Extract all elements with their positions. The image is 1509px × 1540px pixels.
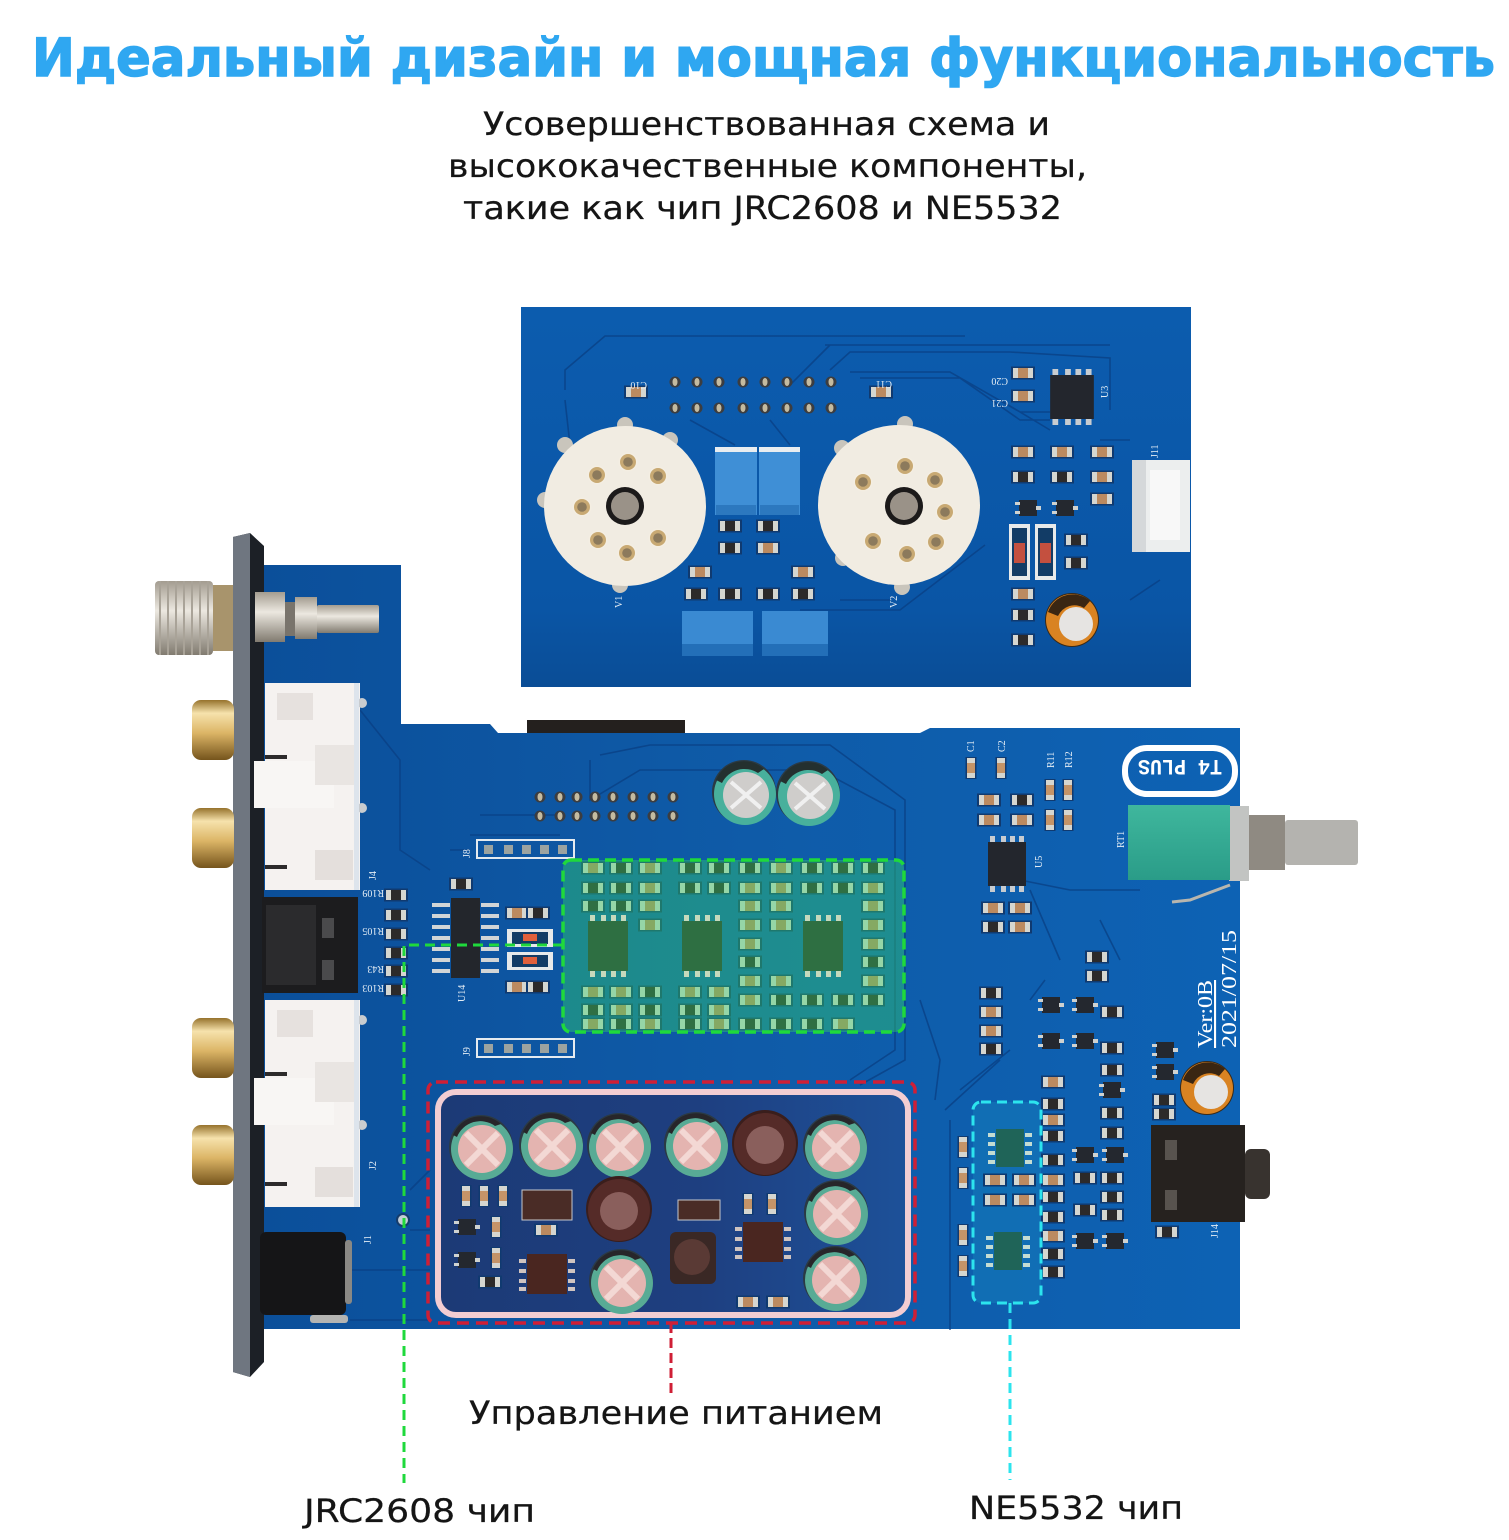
silkscreen labels upper board: C10 [630, 379, 647, 390]
green highlight: JRC2608 zone [563, 860, 904, 1032]
IC U5 [988, 836, 1026, 892]
silkscreen labels upper board: J11 [1150, 444, 1161, 458]
SMD parts [624, 366, 1114, 646]
silkscreen labels main board: R103 [362, 982, 384, 993]
black edge part [527, 720, 685, 733]
silkscreen labels upper board: V1 [614, 596, 625, 608]
IC U3 [1050, 369, 1094, 425]
knurled thumb screw [155, 581, 233, 655]
silkscreen labels main board: R43 [367, 963, 384, 974]
silkscreen labels upper board: V2 [889, 596, 900, 608]
tube socket V2 [818, 416, 980, 595]
power section [438, 1092, 908, 1315]
silkscreen labels upper board: U3 [1100, 386, 1111, 398]
capacitors and inductors [449, 1110, 868, 1314]
leader: power management [670, 1323, 672, 1393]
T4 PLUS badge [1125, 748, 1235, 794]
power ICs [519, 1222, 791, 1294]
electrolytic capacitors EC8 EC3 [712, 760, 840, 826]
power SMD [454, 1185, 790, 1308]
silkscreen labels upper board: C11 [876, 378, 892, 389]
pin header [670, 376, 836, 414]
silkscreen labels main board: R109 [362, 887, 384, 898]
subtitle text block: Усовершенствованная схема и [483, 105, 1050, 143]
silkscreen labels upper board: C21 [991, 397, 1008, 408]
pin header [534, 792, 678, 822]
diodes D1 D2 [522, 1190, 720, 1220]
silkscreen labels main board: J14 [1210, 1224, 1221, 1238]
silkscreen labels main board: J4 [368, 871, 379, 880]
version marking: Ver:0B [1193, 980, 1217, 1048]
panel: metal front plate [233, 533, 264, 1377]
subtitle text block: такие как чип JRC2608 и NE5532 [463, 189, 1062, 227]
title: Идеальный дизайн и мощная функциональность [32, 28, 1495, 89]
amplifier zone parts [581, 862, 885, 1030]
headers J8 J9 [477, 840, 574, 1057]
orange capacitor [1045, 593, 1099, 647]
orange capacitor [1180, 1061, 1234, 1115]
version marking: 2021/07/15 [1217, 930, 1241, 1048]
leader: JRC2608 [404, 945, 563, 1483]
silkscreen labels main board: J1 [363, 1235, 374, 1244]
leader: NE5532 [1008, 1303, 1012, 1480]
potentiometer RT1 [1128, 805, 1358, 902]
inductor L2 [670, 1232, 716, 1284]
silkscreen labels main board: U5 [1034, 856, 1045, 868]
connector J11 [1132, 460, 1190, 552]
label: power management: Управление питанием [469, 1394, 883, 1432]
silkscreen labels upper board [614, 375, 1161, 608]
silkscreen labels upper board: C20 [991, 375, 1008, 386]
right side SMD parts [958, 757, 1179, 1278]
label: NE5532 chip: NE5532 чип [969, 1489, 1183, 1527]
silkscreen labels main board: RT1 [1116, 831, 1127, 848]
subtitle text block [448, 105, 1087, 227]
blue film capacitors [682, 447, 828, 656]
silkscreen labels main board: J2 [368, 1161, 379, 1170]
red highlight: power management zone [428, 1082, 915, 1323]
panel: main board [262, 565, 1358, 1330]
RCA sockets [192, 700, 234, 1185]
silkscreen labels main board: J8 [462, 849, 473, 858]
threaded bolt [255, 592, 379, 642]
white connectors J3 J4 [254, 683, 367, 890]
input resistors [384, 878, 550, 996]
IC U14 [432, 898, 499, 978]
silkscreen labels main board: R105 [362, 925, 384, 936]
white connectors J2 [254, 1000, 367, 1207]
silkscreen labels main board: R12 [1064, 751, 1075, 768]
silkscreen labels main board: C2 [997, 740, 1008, 752]
tube socket V1 [537, 417, 706, 593]
power jack J1 [260, 1232, 352, 1323]
label: JRC2608 chip: JRC2608 чип [302, 1492, 535, 1530]
diodes D3 D8 [1009, 524, 1056, 580]
subtitle text block: высококачественные компоненты, [448, 147, 1087, 185]
T4 PLUS badge: T4 PLUS [1138, 753, 1222, 778]
PCB traces [350, 710, 1140, 1330]
cyan highlight: NE5532 zone [973, 1102, 1041, 1303]
mounting hole [397, 1214, 409, 1226]
diodes D13 D9 [507, 929, 553, 970]
silkscreen labels main board: U14 [457, 985, 468, 1002]
version marking [1193, 930, 1241, 1048]
silkscreen labels main board: R11 [1046, 752, 1057, 768]
black jack socket [262, 897, 358, 993]
silkscreen labels main board: J9 [462, 1047, 473, 1056]
silkscreen labels main board [362, 740, 1221, 1244]
jack J14 [1151, 1125, 1270, 1222]
panel: upper tube board [521, 307, 1191, 687]
silkscreen labels main board: C1 [966, 740, 977, 752]
